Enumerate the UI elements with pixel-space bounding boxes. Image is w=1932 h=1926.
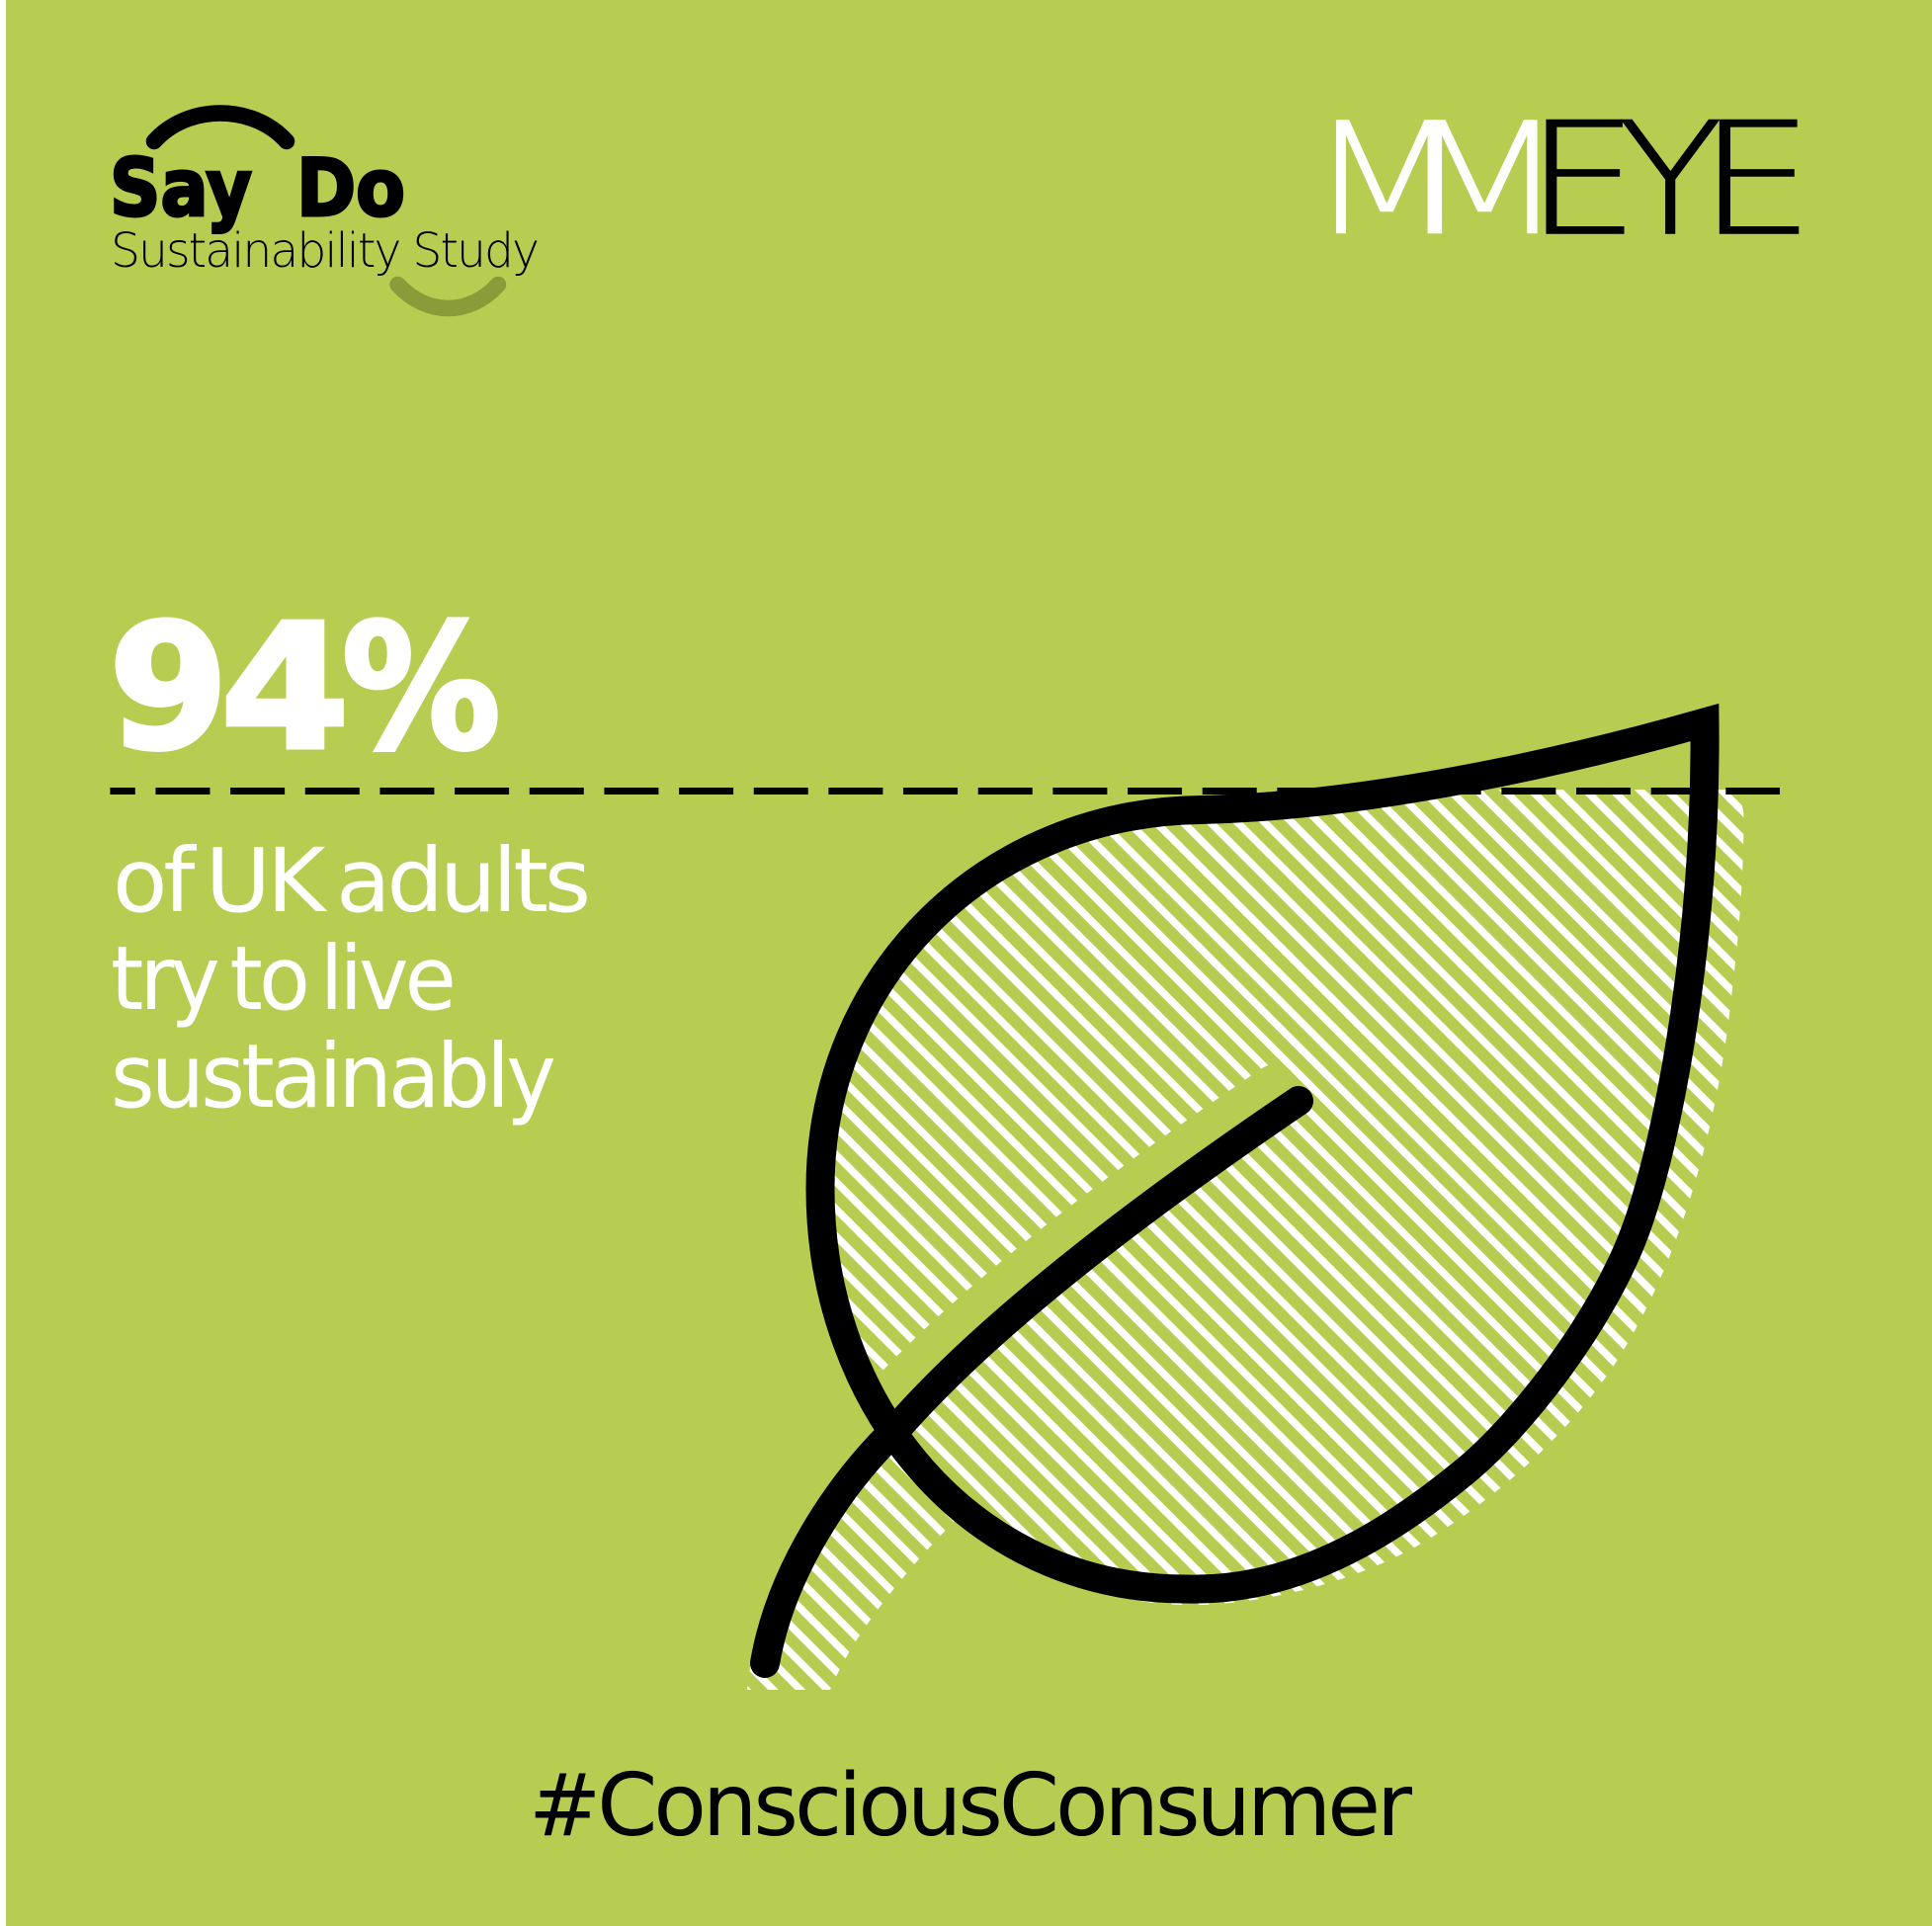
- logo: MMEYE: [1306, 89, 1814, 271]
- dashed divider line: [110, 788, 1780, 795]
- logo letter E: E: [1698, 89, 1814, 270]
- text line 1: of UK adults: [113, 829, 588, 932]
- digit 4: 4: [220, 588, 350, 788]
- percent sign: %: [342, 589, 500, 789]
- digit 9: 9: [109, 588, 228, 789]
- logo word: Say: Say: [110, 142, 252, 234]
- logo letter M: M: [1401, 89, 1568, 270]
- logo letter Y: Y: [1619, 89, 1722, 270]
- leaf hatched shadow: [747, 790, 1744, 1690]
- leaf illustration: [747, 722, 1744, 1690]
- leaf outline: [820, 722, 1705, 1589]
- logo: Say Do Sustainability Study: [110, 113, 538, 308]
- logo letter M: M: [1306, 89, 1468, 270]
- knockout band above stem: [874, 1087, 1275, 1414]
- logo subtitle: Sustainability Study: [111, 223, 538, 279]
- headline statistic: [109, 588, 500, 789]
- text line 3: sustainably: [111, 1025, 554, 1128]
- logo word: Do: Do: [296, 142, 405, 234]
- logo letter E: E: [1525, 90, 1639, 271]
- body text: of UK adults try to live sustainably: [111, 829, 588, 1128]
- text line 2: try to live: [111, 927, 453, 1030]
- leaf stem: [765, 1101, 1299, 1663]
- hashtag: #ConsciousConsumer: [529, 1755, 1412, 1856]
- icon: upper smile arc: [154, 113, 287, 141]
- icon: lower smile arc: [397, 285, 498, 308]
